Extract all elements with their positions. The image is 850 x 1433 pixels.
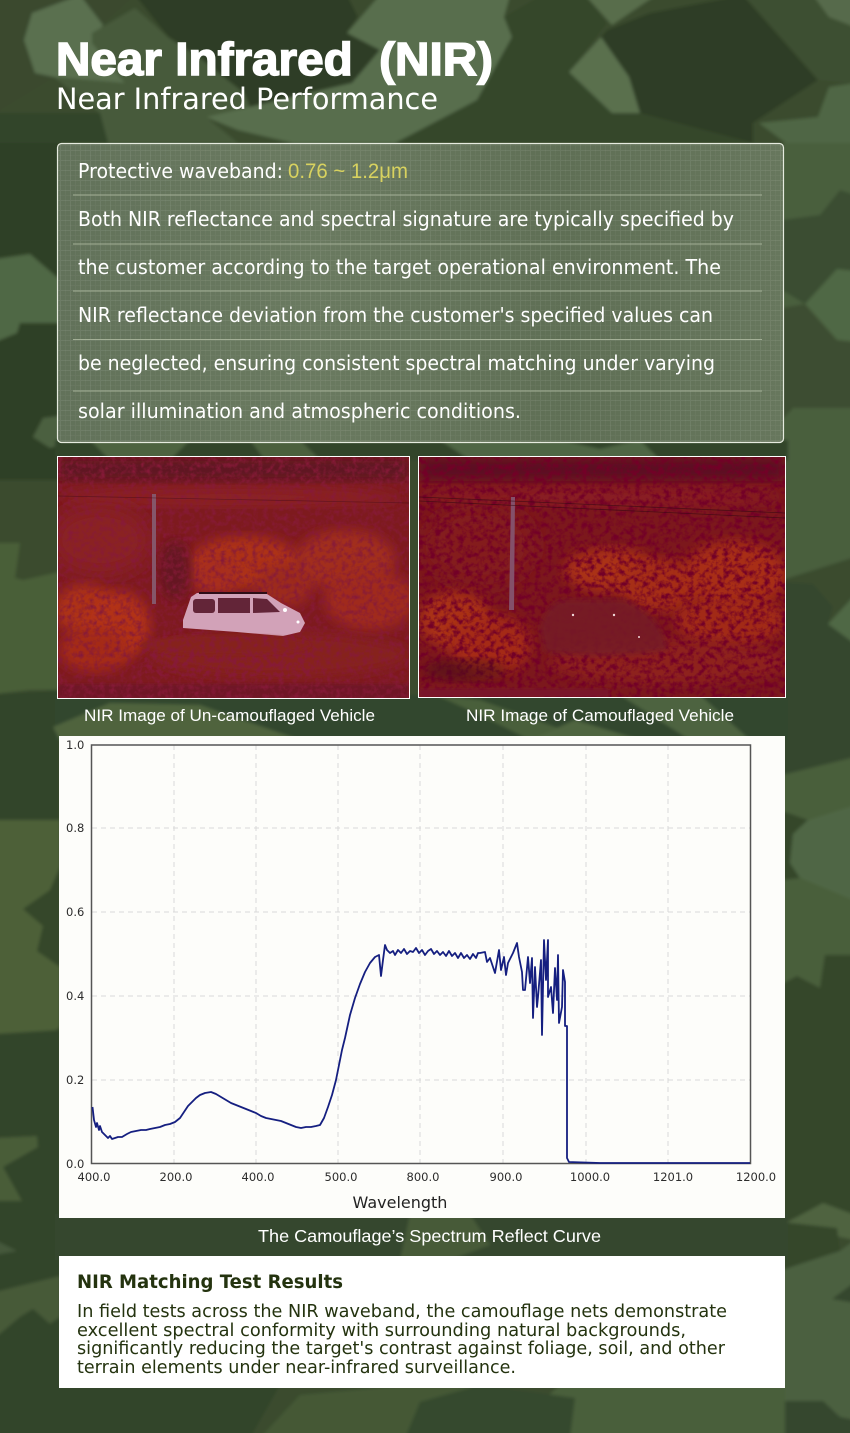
results body [77,1301,727,1378]
y axis labels: 0.4 [66,989,84,1003]
x axis title: Wavelength [353,1193,447,1212]
x axis labels [78,1170,776,1184]
description text: the customer according to the target operational environment. The [78,255,721,279]
title: Near Infrared (NIR) [56,33,493,85]
y axis labels: 0.0 [66,1157,84,1171]
x axis labels: 1000.0 [570,1170,610,1184]
results body: In field tests across the NIR waveband, the camouflage nets demonstrate [77,1301,727,1322]
x axis labels: 1201.0 [653,1170,693,1184]
y axis labels: 0.8 [66,821,84,835]
line chart: spectrum reflectance curve [59,736,785,1218]
hill: camouflaged vehicle [540,600,668,656]
description text: NIR reflectance deviation from the customer's specified values can [78,303,713,327]
description text: Both NIR reflectance and spectral signature are typically specified by [78,207,734,231]
caption: camouflaged image: NIR Image of Camouflaged Vehicle [466,707,734,725]
photo: camouflaged vehicle [418,456,790,698]
photo: un-camouflaged vehicle [50,456,415,699]
x axis labels: 500.0 [325,1170,357,1184]
description text [78,207,734,423]
y axis labels: 0.2 [66,1073,84,1087]
results body: terrain elements under near-infrared surveillance. [77,1357,516,1378]
y axis labels [66,738,84,1171]
results heading: NIR Matching Test Results [77,1271,343,1293]
description text: solar illumination and atmospheric conditions. [78,399,521,423]
panel: NIR matching test results [59,1256,785,1388]
panel: protective waveband description [58,144,784,442]
waveband label: Protective waveband: [78,159,283,183]
results body: excellent spectral conformity with surrounding natural backgrounds, [77,1320,686,1341]
caption: un-camouflaged image: NIR Image of Un-camouflaged Vehicle [84,707,375,725]
subtitle: Near Infrared Performance [56,82,438,116]
x axis labels: 200.0 [160,1170,192,1184]
y axis labels: 0.6 [66,905,84,919]
waveband value: 0.76 ~ 1.2μm [288,159,408,183]
x axis labels: 800.0 [407,1170,439,1184]
results body: significantly reducing the target's contrast against foliage, soil, and other [77,1338,726,1359]
description text: be neglected, ensuring consistent spectral matching under varying [78,351,715,375]
caption: spectrum curve: The Camouflage’s Spectrum Reflect Curve [258,1226,601,1246]
y axis labels: 1.0 [66,738,84,752]
pole [152,494,156,604]
x axis labels: 1200.0 [736,1170,776,1184]
vehicle [183,592,305,636]
x axis labels: 400.0 [78,1170,110,1184]
x axis labels: 400.0 [242,1170,274,1184]
x axis labels: 900.0 [490,1170,522,1184]
pole [509,497,515,610]
spectrum curve [92,940,750,1163]
